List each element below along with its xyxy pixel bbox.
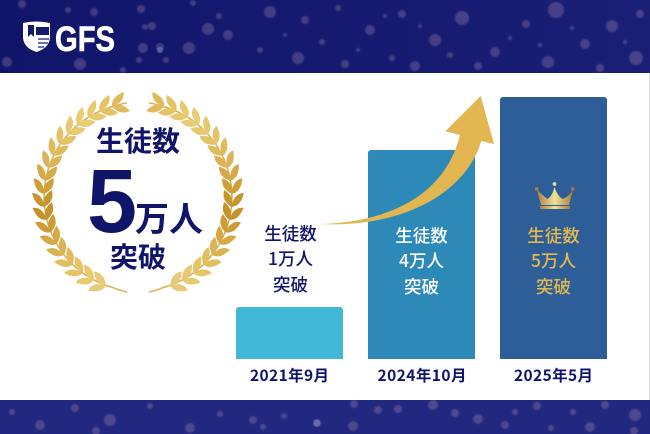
label: 2024 value <box>395 223 448 299</box>
icon: right laurel <box>146 92 244 296</box>
bar: 2024 <box>368 150 475 359</box>
header band <box>0 0 650 73</box>
label: 2021 value <box>264 221 317 297</box>
badge number: 50,000 <box>87 152 203 252</box>
label: date 2025: 2025年5月 <box>514 364 593 386</box>
label: 2024 value: 4万人 <box>399 248 444 273</box>
arrow: growth <box>320 96 494 224</box>
footer band <box>0 400 650 434</box>
logo: GFS <box>23 20 115 59</box>
label: 2025 value: 5万人 <box>531 248 576 273</box>
right edge line <box>649 73 650 400</box>
label: 2025 value: 生徒数 <box>527 223 580 248</box>
icon: crown <box>535 182 575 209</box>
label: 2025 value: 突破 <box>536 274 571 299</box>
label: date 2024: 2024年10月 <box>378 364 466 386</box>
icon: shield <box>23 22 50 52</box>
badge text: students: 生徒数 <box>96 120 180 160</box>
label: date 2021: 2021年9月 <box>250 364 329 386</box>
bar: 2025 <box>500 97 607 359</box>
bar: 2021 <box>236 307 343 359</box>
label: 2021 value: 突破 <box>273 272 308 297</box>
label: 2025 value <box>527 223 580 299</box>
badge number: 50,000: 万人 <box>135 192 203 241</box>
badge text: breakthrough: 突破 <box>110 236 166 276</box>
icon: left laurel <box>32 92 130 296</box>
logo wordmark: GFS <box>55 20 115 59</box>
label: 2021 value: 1万人 <box>268 246 313 271</box>
badge number: 50,000: 5 <box>87 152 137 252</box>
bar chart <box>236 96 607 386</box>
label: 2024 value: 生徒数 <box>395 223 448 248</box>
laurel wreath badge <box>32 92 244 296</box>
label: 2021 value: 生徒数 <box>264 221 317 246</box>
label: 2024 value: 突破 <box>404 274 439 299</box>
